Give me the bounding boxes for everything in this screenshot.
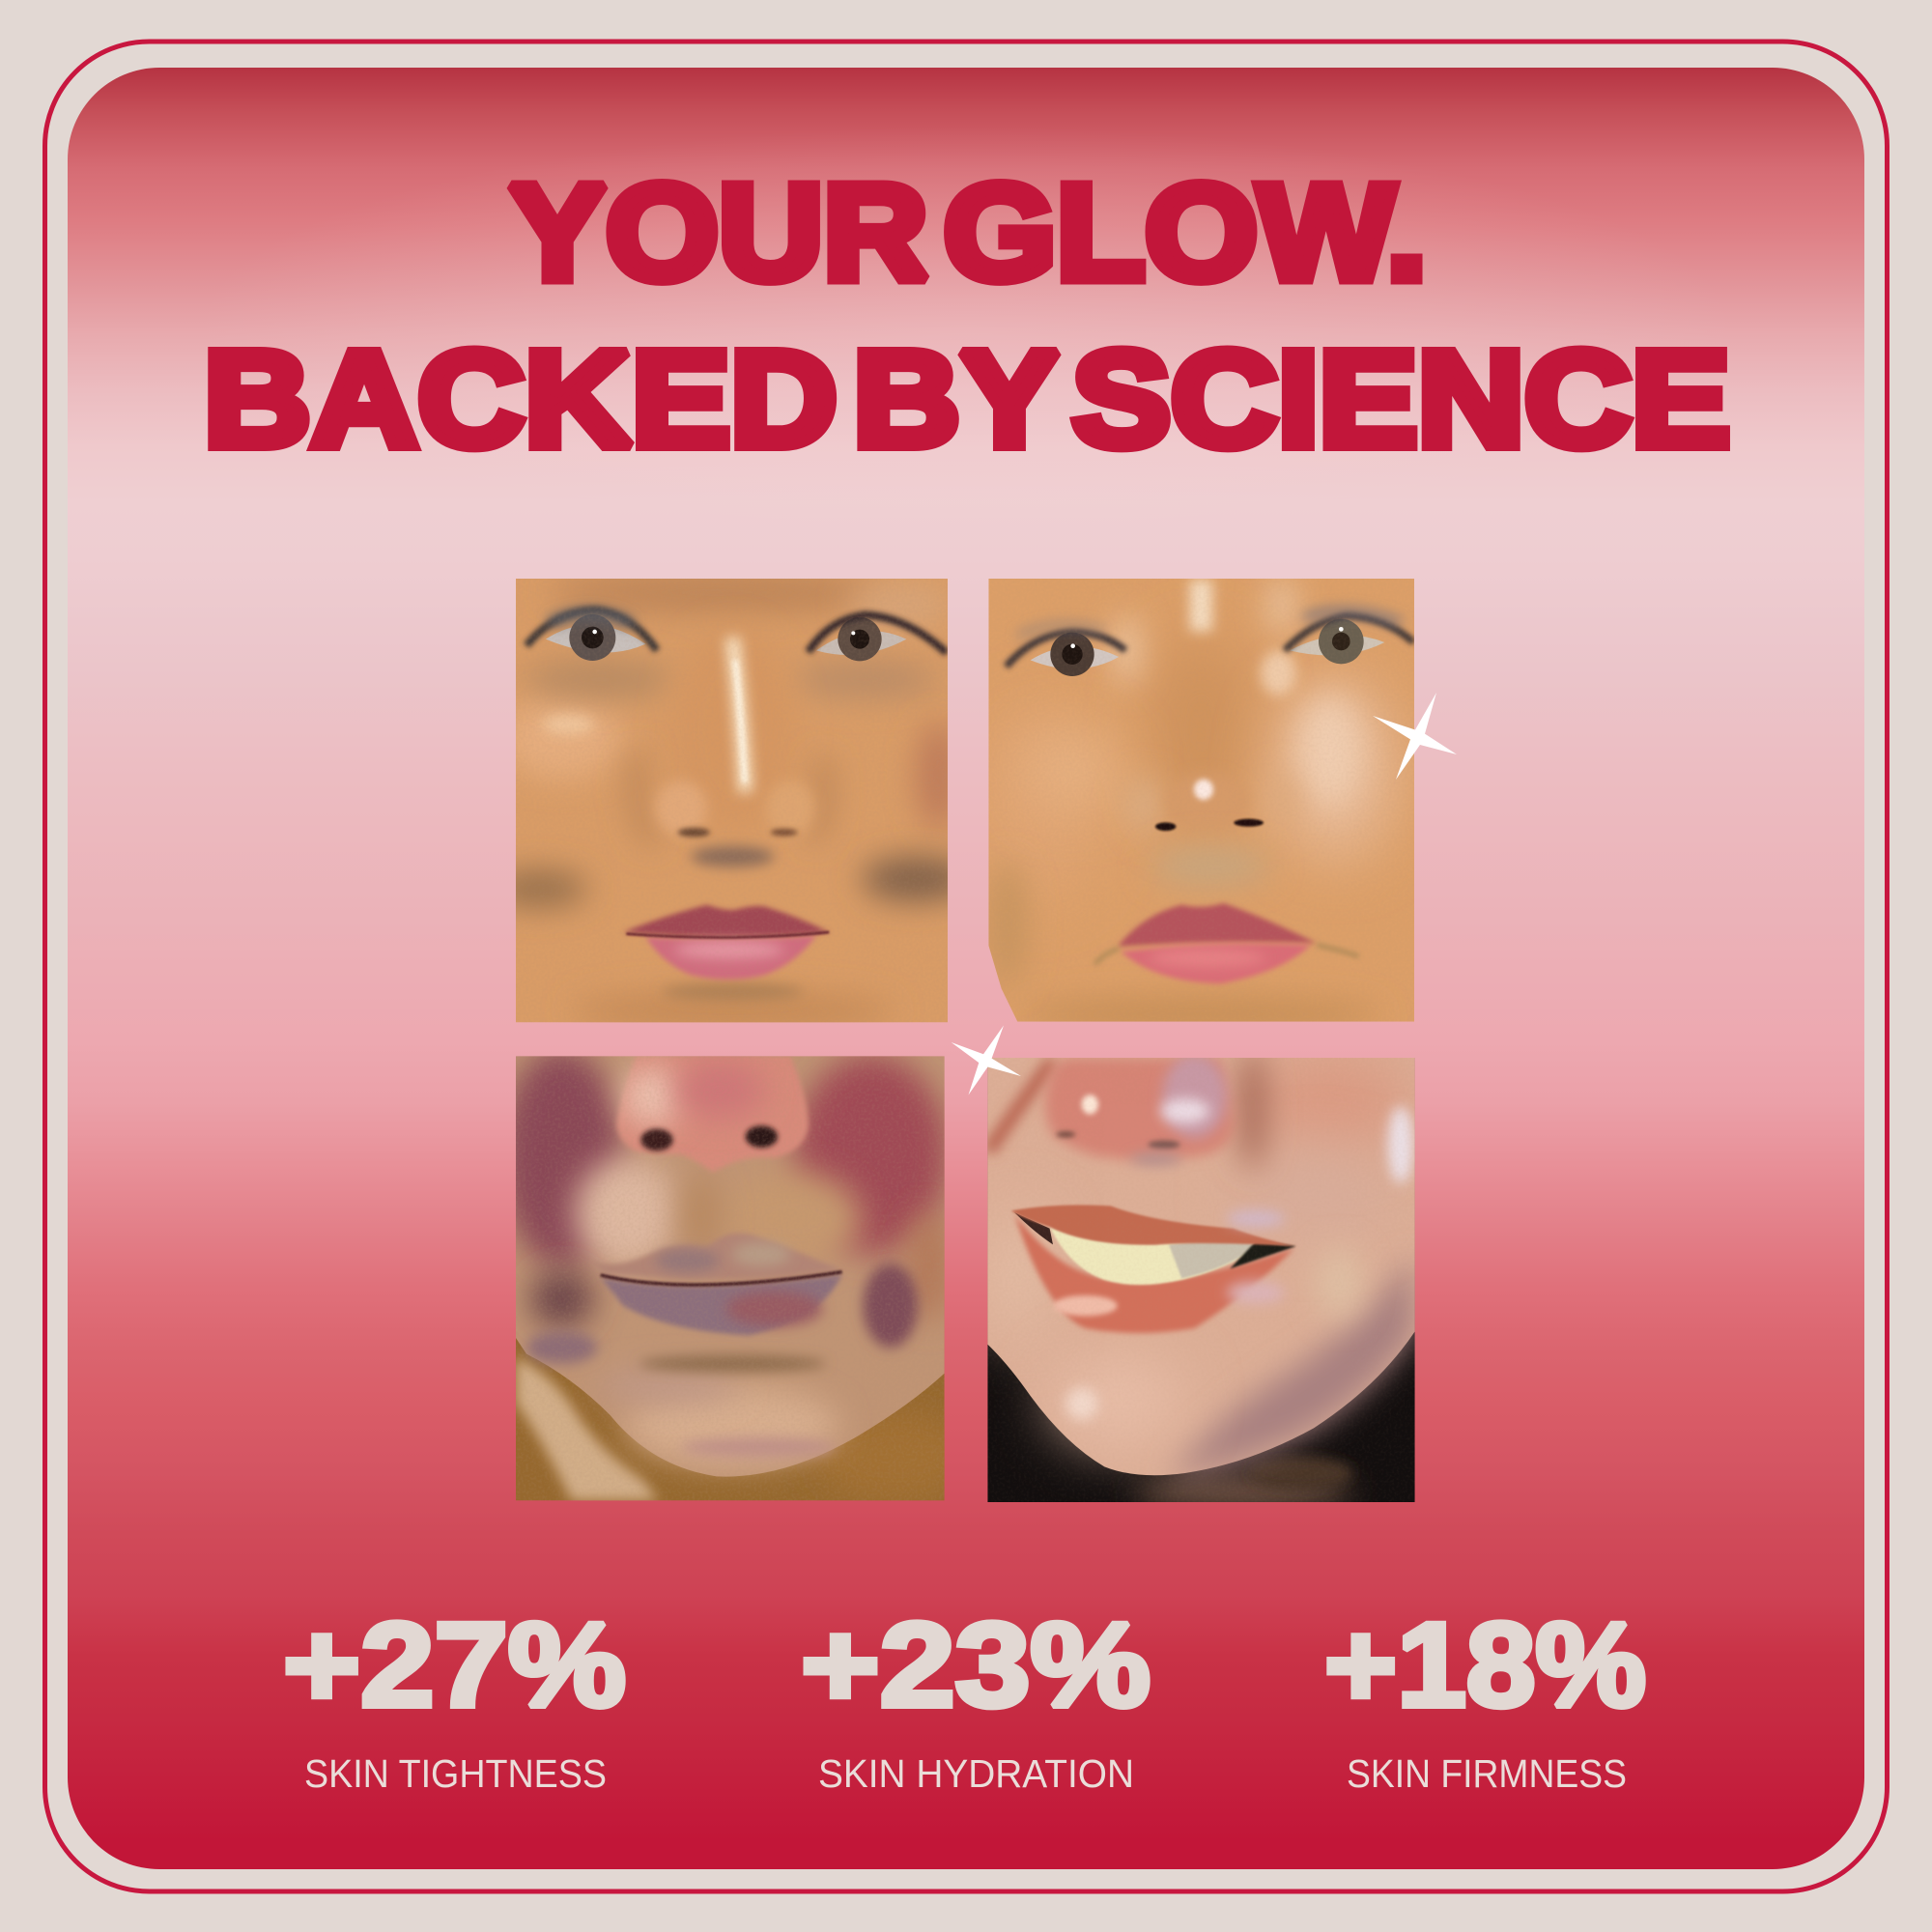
title line 1: YOUR GLOW. <box>509 156 1427 308</box>
nostrils <box>678 828 798 837</box>
left eye <box>526 611 657 661</box>
stat: skin hydration: SKIN HYDRATION <box>818 1751 1134 1796</box>
nose <box>1045 1055 1234 1165</box>
stat: skin hydration <box>801 1599 1151 1796</box>
right eye <box>1285 611 1413 664</box>
stat: skin tightness: SKIN TIGHTNESS <box>304 1751 607 1796</box>
stat: skin tightness <box>283 1599 626 1796</box>
lips <box>591 1234 842 1335</box>
lips <box>1094 903 1359 983</box>
right eye <box>809 615 947 661</box>
nose <box>616 1056 809 1172</box>
photo: before upper face <box>516 579 948 1022</box>
stat: skin hydration: +23% <box>801 1599 1151 1732</box>
stat: skin firmness: +18% <box>1324 1599 1646 1732</box>
photo: after upper face <box>976 577 1416 1031</box>
stats <box>283 1599 1646 1796</box>
photo grid <box>491 570 1457 1509</box>
icon: sparkle centre <box>952 1026 1021 1095</box>
stat: skin firmness: SKIN FIRMNESS <box>1347 1751 1627 1796</box>
title line 2: BACKED BY SCIENCE <box>204 323 1730 475</box>
smile <box>1011 1205 1296 1333</box>
lips <box>623 905 829 1000</box>
nostrils <box>1155 819 1264 831</box>
title <box>204 156 1730 475</box>
left eye <box>1007 625 1125 676</box>
photo: after lower face <box>984 1048 1416 1509</box>
stat: skin tightness: +27% <box>283 1599 626 1732</box>
photo: before lower face <box>516 1056 945 1501</box>
icon: sparkle right <box>1373 693 1457 780</box>
stat: skin firmness <box>1324 1599 1646 1796</box>
